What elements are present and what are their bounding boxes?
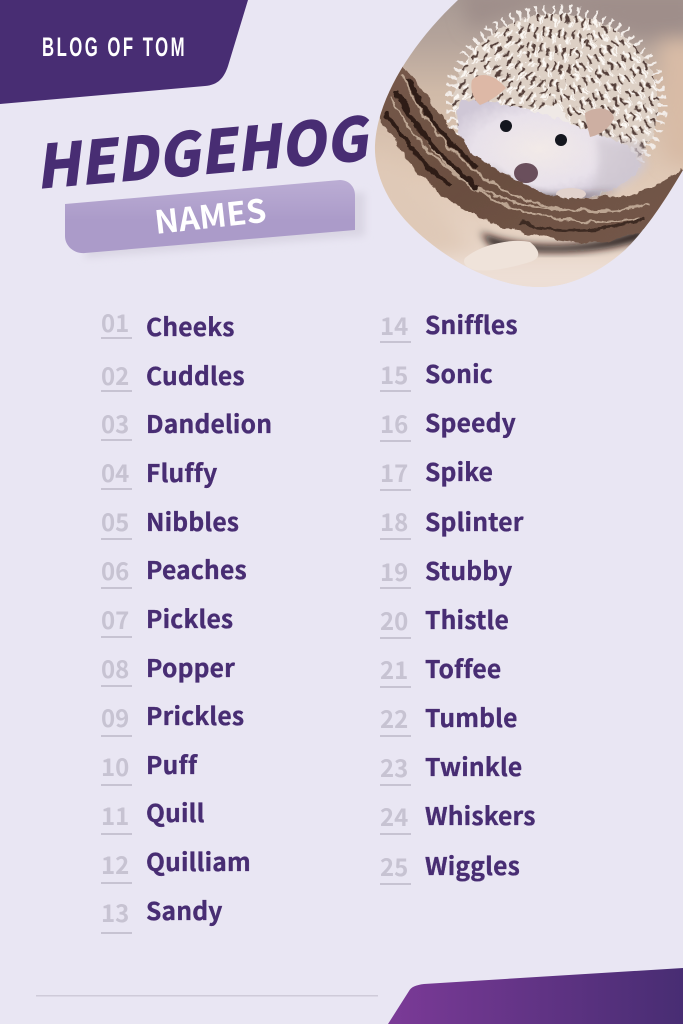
eyes <box>500 120 512 132</box>
name 20 <box>380 601 509 639</box>
name 12: 12 <box>101 846 129 881</box>
name 01: 01 <box>101 304 129 339</box>
blurred backdrop <box>370 0 683 295</box>
name 23 <box>380 748 522 786</box>
name 08: 08 <box>101 650 129 685</box>
name 08 <box>101 649 235 687</box>
name 14: Sniffles <box>425 306 518 342</box>
name 23: Twinkle <box>425 748 522 784</box>
bark log <box>378 65 683 242</box>
ears <box>471 75 506 105</box>
name 11: Quill <box>146 794 205 830</box>
rock <box>464 240 538 266</box>
name 07 <box>101 600 233 638</box>
name 22: Tumble <box>425 699 518 735</box>
subtitle pill: names <box>65 180 365 258</box>
name 18 <box>380 503 524 540</box>
name 17 <box>380 453 493 491</box>
name 21 <box>380 650 501 688</box>
name 23: 23 <box>380 749 408 784</box>
hedgehog body <box>445 4 668 200</box>
name 15 <box>380 355 493 392</box>
name 24 <box>380 797 536 835</box>
name 04: Fluffy <box>146 454 217 490</box>
name 05: 05 <box>101 503 129 538</box>
name 25: 25 <box>380 848 408 883</box>
name 10 <box>101 746 198 786</box>
hedgehog photo blob <box>370 0 683 295</box>
name 02: Cuddles <box>146 357 245 393</box>
name 19: 19 <box>380 553 408 588</box>
name 15: 15 <box>380 356 408 391</box>
name 18: Splinter <box>425 503 524 539</box>
name 24: Whiskers <box>425 797 536 833</box>
name 06: Peaches <box>146 551 247 587</box>
name 06: 06 <box>101 552 129 587</box>
name 10: Puff <box>146 746 198 782</box>
name 10: 10 <box>101 748 129 783</box>
face and belly fur <box>457 100 640 198</box>
log under-shadow <box>480 225 650 252</box>
paw <box>556 188 586 200</box>
name 17: 17 <box>380 454 408 489</box>
name 25 <box>380 847 520 885</box>
name 18: 18 <box>380 503 408 538</box>
title: Hedgehog: HEDGEHOG <box>35 91 377 207</box>
subtitle text: NAMES <box>152 186 268 244</box>
name 07: 07 <box>101 601 129 636</box>
name 11 <box>101 794 205 835</box>
name 19 <box>380 552 512 589</box>
names list: column two <box>380 306 536 885</box>
name 13: 13 <box>101 894 129 929</box>
name 08: Popper <box>146 649 235 685</box>
name 14 <box>380 306 518 343</box>
name 17: Spike <box>425 453 493 489</box>
name 09: Prickles <box>146 697 244 733</box>
name 11: 11 <box>101 797 129 832</box>
name 12: Quilliam <box>146 843 251 879</box>
name 01: Cheeks <box>146 308 235 344</box>
name 03: Dandelion <box>146 405 272 441</box>
name 09: 09 <box>101 699 129 734</box>
dirt <box>422 248 452 264</box>
name 24: 24 <box>380 798 408 833</box>
name 05 <box>101 503 239 540</box>
name 14: 14 <box>380 307 408 342</box>
footer banner <box>388 968 683 1024</box>
name 03: 03 <box>101 405 129 440</box>
name 05: Nibbles <box>146 503 239 539</box>
name 22: 22 <box>380 700 408 735</box>
name 20: 20 <box>380 602 408 637</box>
name 06 <box>101 551 247 589</box>
name 07: Pickles <box>146 600 233 636</box>
names list: column one <box>101 304 272 934</box>
shadow under chin <box>493 166 615 200</box>
header banner <box>0 0 248 104</box>
name 16 <box>380 404 516 442</box>
name 13 <box>101 892 223 934</box>
name 21: Toffee <box>425 650 501 686</box>
name 12 <box>101 843 251 884</box>
name 16: 16 <box>380 405 408 440</box>
name 02: 02 <box>101 357 129 392</box>
brand name: BLOG OF TOM <box>42 32 187 62</box>
name 09 <box>101 697 244 737</box>
name 13: Sandy <box>146 892 223 928</box>
name 25: Wiggles <box>425 847 520 883</box>
name 15: Sonic <box>425 355 493 391</box>
name 22 <box>380 699 518 737</box>
name 19: Stubby <box>425 552 512 588</box>
nose <box>514 163 538 183</box>
name 20: Thistle <box>425 601 509 637</box>
footer rule <box>36 995 378 996</box>
name 04: 04 <box>101 454 129 489</box>
name 16: Speedy <box>425 404 516 440</box>
name 02 <box>101 357 245 393</box>
name 21: 21 <box>380 651 408 686</box>
name 01 <box>101 304 235 344</box>
name 04 <box>101 454 217 490</box>
